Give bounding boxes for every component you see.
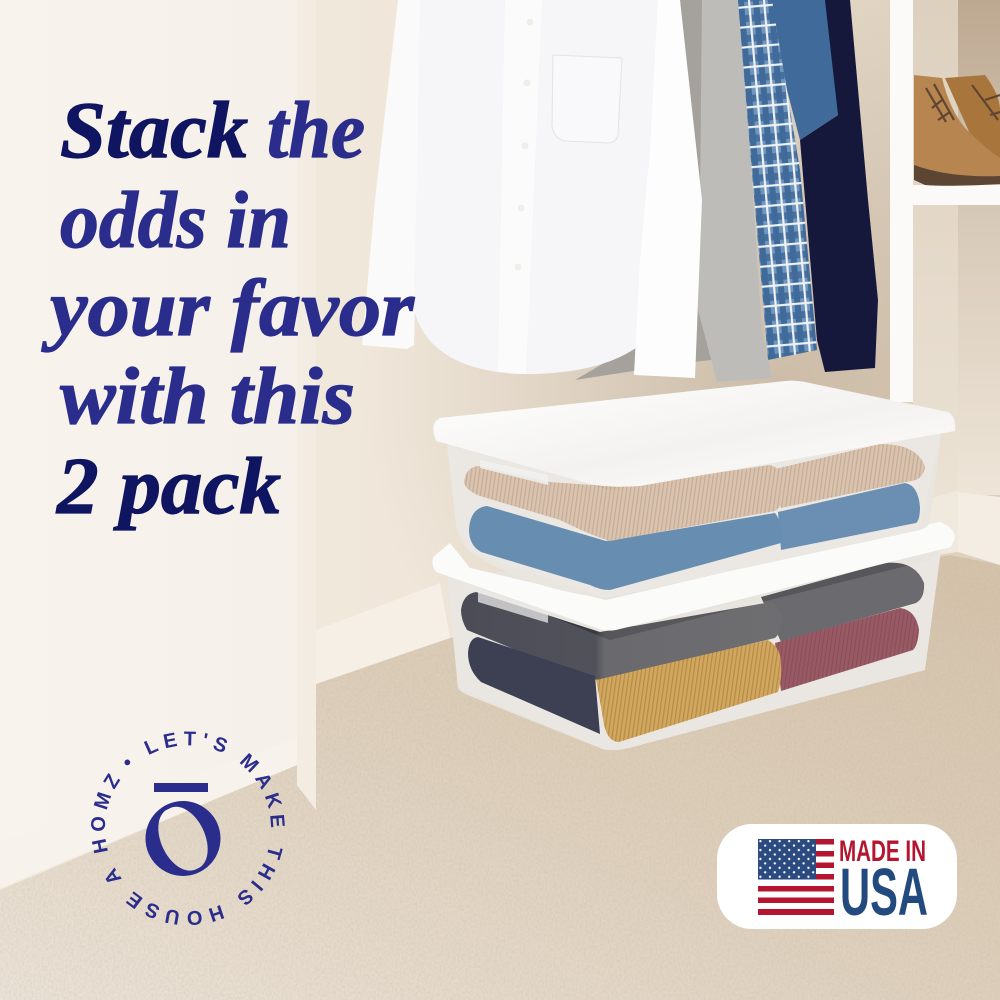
line: 2 pack: 2 pack — [56, 443, 281, 531]
white shirt left sleeve — [362, 0, 422, 349]
lower box clip tab — [478, 590, 548, 623]
navy sweater — [800, 0, 878, 372]
upper box sheen — [447, 433, 941, 598]
grey back shirt — [575, 0, 712, 380]
white shirt body — [414, 0, 690, 374]
line: odds in: odds in — [60, 177, 291, 265]
plaid shirt — [735, 0, 817, 360]
storage boxes — [432, 381, 955, 750]
blue tee — [770, 0, 838, 140]
brand logo — [91, 732, 285, 925]
lower box body — [447, 550, 941, 750]
headline — [40, 87, 415, 531]
shelving unit — [890, 0, 1000, 565]
placket — [498, 0, 542, 374]
lower box sheen — [447, 550, 941, 750]
left closet door panel — [0, 0, 316, 888]
lower box clothes — [461, 563, 924, 742]
logo bar — [154, 783, 208, 792]
wall baseboard — [316, 583, 450, 684]
made in text: MADE IN — [839, 835, 926, 868]
made in USA badge — [717, 824, 957, 930]
upper box lid — [433, 381, 955, 487]
logo letter o — [146, 801, 220, 876]
wall shadow behind clothes — [316, 0, 890, 700]
word: the: the — [267, 87, 365, 175]
shirt buttons — [514, 18, 534, 270]
circular slogan: • LET'S MAKE THIS HOUSE A HOMZ — [91, 732, 285, 925]
lower box lid — [432, 522, 955, 631]
grey shirt sleeve — [698, 0, 772, 382]
boots on shelf — [914, 75, 1000, 186]
word: Stack: Stack — [60, 87, 248, 175]
upper box body — [447, 433, 941, 598]
line: with this: with this — [60, 353, 355, 441]
upper box clothes — [464, 444, 925, 590]
carpet floor — [0, 555, 1000, 1000]
shirt pocket — [552, 55, 622, 143]
badge background — [717, 824, 957, 929]
upper box clip tab — [480, 460, 548, 485]
USA text: USA — [840, 855, 928, 930]
hanging clothes — [362, 0, 878, 382]
US flag — [758, 839, 834, 915]
line: your favor: your favor — [40, 265, 415, 353]
white shirt right sleeve — [634, 0, 702, 378]
